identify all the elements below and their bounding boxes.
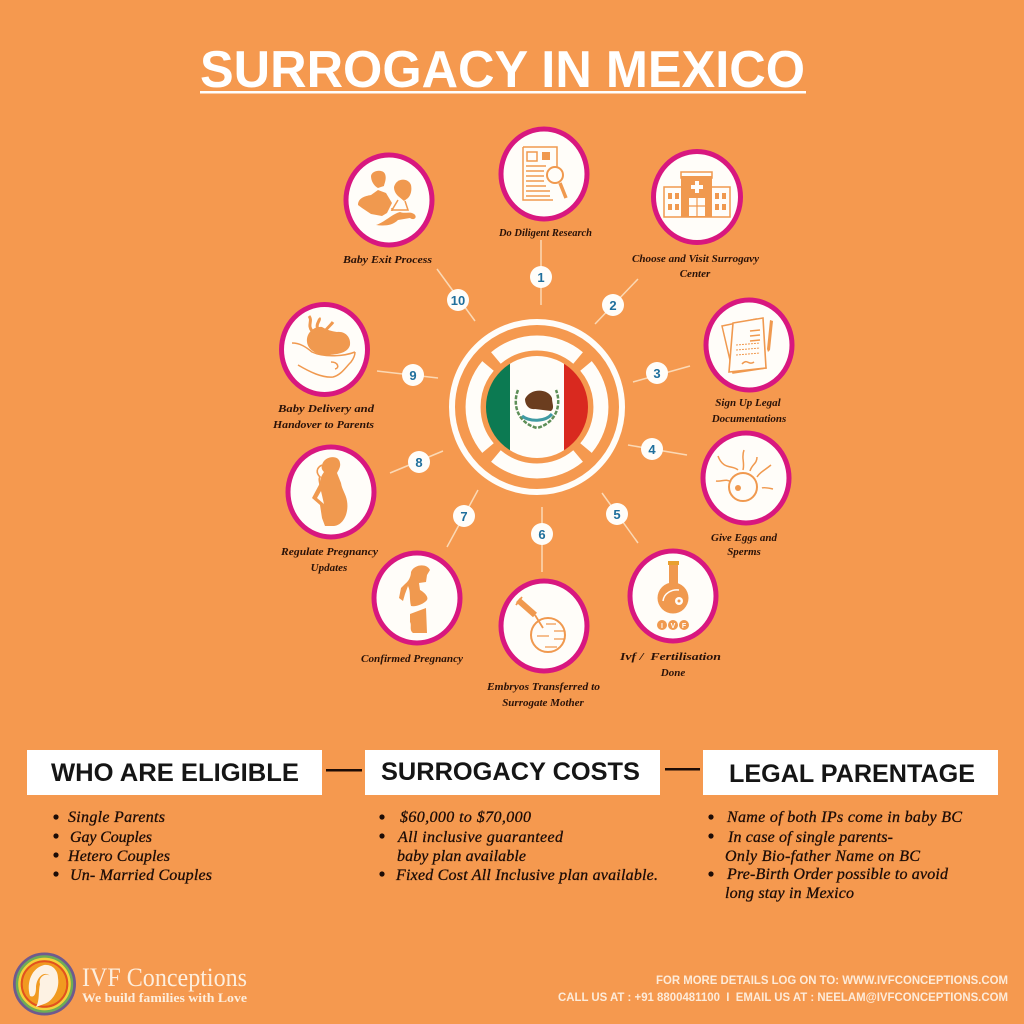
step 4 number <box>628 438 687 460</box>
step 3 number <box>633 362 690 384</box>
brand text: IVF Conceptions <box>82 963 247 992</box>
footer contact details <box>558 973 1008 1004</box>
step 1: research <box>498 129 592 239</box>
step connectors and numbers <box>377 240 690 572</box>
bullet list <box>708 809 962 902</box>
label: Surrogate Mother <box>502 697 585 709</box>
label: Baby Delivery and <box>277 403 375 415</box>
step 7 number: 7 <box>460 509 468 524</box>
bullet list: baby plan available <box>397 848 526 865</box>
brand text <box>82 963 247 1005</box>
step 5: IVF flask: I <box>661 623 663 630</box>
step 9: baby delivery <box>272 304 375 431</box>
footer contact details: CALL US AT : +91 8800481100 I EMAIL US AT : NEELAM@IVFCONCEPTIONS.COM <box>558 990 1008 1004</box>
step 3 number: 3 <box>653 366 661 381</box>
step 5 number <box>602 493 638 543</box>
bullet list: Pre-Birth Order possible to avoid <box>726 866 949 883</box>
step 4: eggs and sperms <box>703 433 789 558</box>
bullet list: Fixed Cost All Inclusive plan available. <box>395 867 658 884</box>
label: Sign Up Legal <box>715 397 782 409</box>
step 9 number <box>377 364 438 386</box>
step 3: legal documents <box>706 300 792 425</box>
label: Regulate Pregnancy <box>280 546 378 558</box>
step 5: IVF flask: F <box>682 623 687 630</box>
heading: SURROGACY COSTS <box>381 758 640 786</box>
label: Updates <box>311 562 347 574</box>
central hub: Mexican flag <box>452 322 622 492</box>
panel: surrogacy costs <box>365 750 660 884</box>
step 10: baby exit process <box>342 155 432 266</box>
panel: legal parentage <box>703 750 998 902</box>
label: Give Eggs and <box>711 532 778 544</box>
step 1 number: 1 <box>537 270 545 285</box>
step 5 number: 5 <box>613 507 621 522</box>
logo: IVF Conceptions <box>14 954 247 1014</box>
bullet list <box>379 809 658 884</box>
step 6 number: 6 <box>538 527 546 542</box>
label: Center <box>680 268 711 280</box>
step 7 number <box>447 490 478 547</box>
heading: WHO ARE ELIGIBLE <box>51 759 299 787</box>
label: Sperms <box>727 546 761 558</box>
step 8: regulate pregnancy <box>280 447 378 574</box>
label: Done <box>660 667 685 679</box>
step 5: IVF flask: V <box>671 623 676 630</box>
label: Do Diligent Research <box>498 227 592 239</box>
step 10 number <box>437 269 475 321</box>
label: Handover to Parents <box>272 419 374 431</box>
label <box>711 532 778 558</box>
label <box>486 681 601 709</box>
label <box>280 546 378 574</box>
bullet list: Un- Married Couples <box>70 867 212 884</box>
label <box>711 397 786 425</box>
bullet list <box>53 809 212 884</box>
label: Documentations <box>711 413 786 425</box>
step 10 number: 10 <box>451 293 465 308</box>
bullet list: $60,000 to $70,000 <box>400 809 531 826</box>
bullet list: Hetero Couples <box>67 848 170 865</box>
panel: who are eligible <box>27 750 322 884</box>
footer contact details: FOR MORE DETAILS LOG ON TO: WWW.IVFCONCEPTIONS.COM <box>656 973 1008 987</box>
step 2 number: 2 <box>609 298 617 313</box>
connector dash left <box>326 769 362 772</box>
step 6 number <box>531 507 553 572</box>
step 6: embryo transfer <box>486 581 601 709</box>
bullet list: In case of single parents- <box>727 829 893 846</box>
title: SURROGACY IN MEXICO <box>200 41 805 99</box>
bullet list: Single Parents <box>68 809 165 826</box>
step 2: hospital <box>632 152 759 280</box>
label <box>272 403 375 431</box>
step 9 number: 9 <box>409 368 417 383</box>
step 5: IVF flask <box>619 551 721 679</box>
heading: LEGAL PARENTAGE <box>729 760 975 788</box>
bullet list: Name of both IPs come in baby BC <box>726 809 962 826</box>
label <box>632 253 759 280</box>
label: Embryos Transferred to <box>486 681 601 693</box>
step 8 number: 8 <box>415 455 423 470</box>
bullet list: long stay in Mexico <box>725 885 854 902</box>
label: Ivf / Fertilisation <box>619 651 721 663</box>
label: Confirmed Pregnancy <box>361 653 463 665</box>
step 1 number <box>530 240 552 305</box>
bullet list: Only Bio-father Name on BC <box>725 848 920 865</box>
label: Baby Exit Process <box>342 254 432 266</box>
step 8 number <box>390 451 443 473</box>
label <box>619 651 721 679</box>
bullet list: All inclusive guaranteed <box>397 829 564 846</box>
bullet list: Gay Couples <box>70 829 152 846</box>
connector dash right <box>665 768 700 770</box>
step 4 number: 4 <box>648 442 656 457</box>
brand text: We build families with Love <box>82 990 247 1005</box>
step 7: confirmed pregnancy <box>361 553 463 665</box>
step 2 number <box>595 279 638 324</box>
label: Choose and Visit Surrogavy <box>632 253 759 265</box>
